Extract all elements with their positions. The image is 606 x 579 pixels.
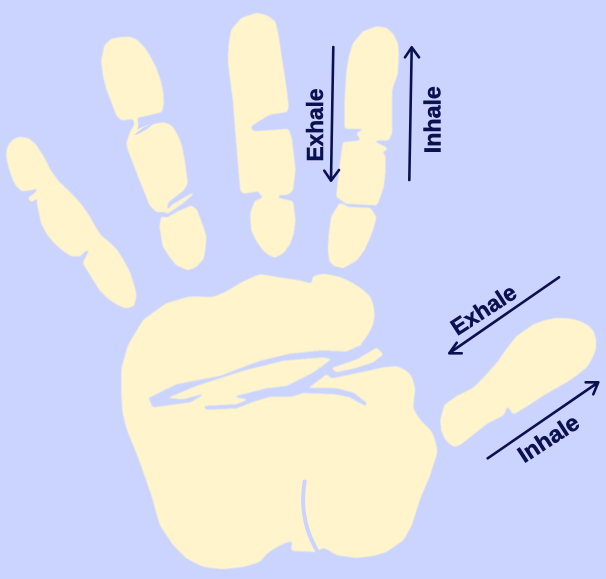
label: Inhale thumb: Inhale bbox=[513, 409, 584, 468]
label: Exhale thumb: Exhale bbox=[446, 279, 521, 340]
thumb bbox=[441, 318, 596, 447]
index finger bbox=[102, 37, 206, 270]
palm creases bbox=[149, 343, 400, 409]
palm: small finger fragment bbox=[333, 348, 383, 372]
index finger slits bbox=[134, 119, 156, 135]
palm bbox=[122, 274, 437, 569]
palm: thumb-side crease bbox=[303, 482, 317, 551]
arrow: ring inhale (up) bbox=[405, 47, 419, 180]
arrow: middle-ring exhale (down) bbox=[324, 47, 339, 181]
middle finger bbox=[228, 13, 295, 257]
arrow: thumb inhale bbox=[488, 382, 598, 458]
ring finger bbox=[328, 27, 398, 268]
pinky finger bbox=[7, 137, 136, 308]
label: Inhale vertical: Inhale bbox=[420, 86, 446, 153]
palm: base shape bbox=[122, 274, 437, 569]
arrow: thumb exhale bbox=[449, 277, 559, 353]
label: Exhale vertical: Exhale bbox=[302, 88, 328, 162]
